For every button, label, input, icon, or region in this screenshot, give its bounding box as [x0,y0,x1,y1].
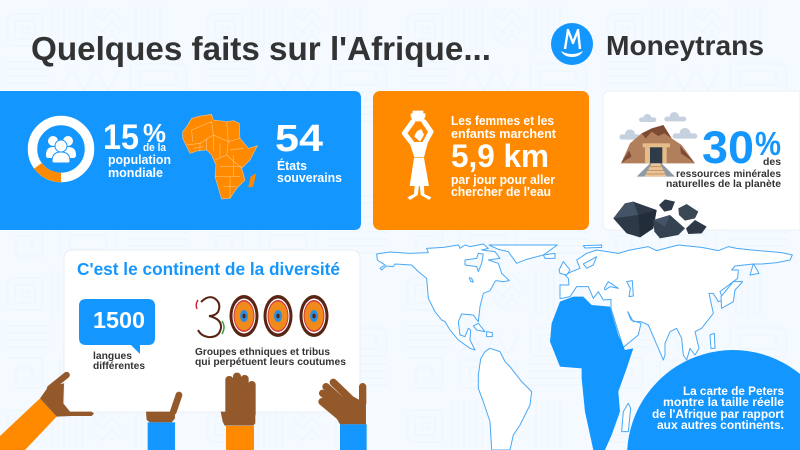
speech bubble: 1500 languages: 1500 [93,307,145,333]
Hudson Bay [465,253,483,272]
sea: Black Sea [604,282,618,290]
landmass: Greenland [489,245,557,263]
landmass: Africa [550,297,633,450]
callout: Peters map note: de l'Afrique par rapport [652,409,784,421]
Great Lakes [469,278,473,282]
hand 4 [322,382,367,450]
text: walking distance: par jour pour aller [451,173,555,187]
stat: 30 percent of mineral resources: % [755,125,781,162]
map: South America and Africa [478,348,631,450]
stat: 15 percent of world population [103,118,171,180]
hands holding the card [0,373,367,450]
stat: 15 percent of world population: de la [143,142,167,154]
icon: coal [613,199,707,238]
icon: mine in mountain [619,112,697,177]
text: walking distance: chercher de l'eau [451,185,551,199]
callout: Peters map note [627,350,800,450]
stat: 54 sovereign states: 54 [275,118,323,160]
landmass: Eurasia [560,245,792,360]
stat: 30 percent of mineral resources: naturelles de la planète [666,178,781,190]
stat: 30 percent of mineral resources [666,122,781,190]
stat: 54 sovereign states: États [277,158,307,173]
hand 3 [221,373,256,450]
donut chart: 15 percent [32,120,90,178]
stat: 54 sovereign states [275,118,342,185]
callout: Peters map note: aux autres continents. [657,420,784,432]
landmass: North America [377,244,509,350]
landmass: South America [478,348,532,450]
hand 1 [0,375,94,450]
stat: 30 percent of mineral resources: des [763,156,781,168]
map: Africa with countries [183,114,257,199]
title: Quelques faits sur l'Afrique... [31,30,491,67]
island: Sri Lanka and Sumatra [710,333,715,348]
panel: mineral resources [603,91,800,238]
logo: Moneytrans [551,23,764,65]
sea: Caspian [627,281,633,297]
island: Madagascar [622,403,631,432]
text: ethnic groups [195,347,346,368]
island: Britain [559,262,570,275]
text: walking distance: 5,9 km [451,138,549,174]
heading: C'est le continent de la diversité [77,259,340,279]
stat: 30 percent of mineral resources: ressources minérales [676,168,781,180]
callout: Peters map note: La carte de Peters [683,386,784,398]
panel: diversity card [64,250,360,412]
map: Americas west part [377,244,557,350]
text: walking distance: Les femmes et les [451,114,554,128]
text: walking distance [451,114,557,199]
speech bubble: 1500 languages: différentes [93,360,145,372]
speech bubble: 1500 languages [79,299,155,372]
island: Japan [721,282,743,308]
callout: Peters map note: montre la taille réelle [663,397,784,409]
stat: 15 percent of world population: 15 [103,118,139,157]
stat: 30 percent of mineral resources: 30 [702,122,754,173]
text: ethnic groups: Groupes ethniques et tribus [195,347,330,358]
map: Eurasia [559,245,792,360]
panel: walking for water [373,91,589,230]
world map: Peters projection [377,244,792,450]
hand 2 [146,395,179,450]
icon: woman carrying a jar [404,111,431,200]
stat: 54 sovereign states: souverains [277,171,342,185]
stat: 15 percent of world population: mondiale [108,166,163,180]
island: Cuba [473,323,485,332]
decorated 3000 [196,295,328,337]
logo: Moneytrans: Moneytrans [606,30,764,61]
icon: people [46,136,76,163]
island: Iceland [543,253,555,258]
text: walking distance: enfants marchent [451,127,557,141]
island: Svalbard [583,245,602,248]
stat: 15 percent of world population: % [143,118,166,148]
stat: 15 percent of world population: population [108,153,171,167]
text: ethnic groups: qui perpétuent leurs coutumes [195,357,346,368]
panel: population and states [0,91,361,230]
island: Hispaniola [487,332,492,337]
sea: Baltic [583,257,597,268]
speech bubble: 1500 languages: langues [93,350,132,362]
